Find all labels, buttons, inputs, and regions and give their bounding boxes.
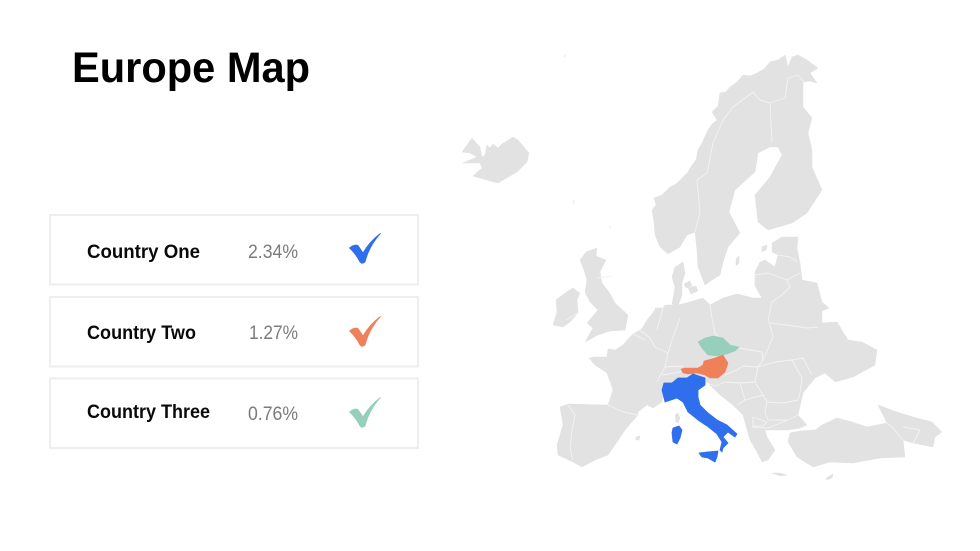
row: country one bbox=[50, 215, 418, 284]
base land: grey countries bbox=[462, 54, 942, 480]
country borders bbox=[566, 75, 920, 460]
row: country one: Country One bbox=[87, 242, 200, 263]
title: Europe Map bbox=[72, 44, 310, 92]
row: country two: Country Two bbox=[87, 323, 196, 344]
row: country three: Country Three bbox=[87, 402, 210, 423]
row: country three: 0.76% bbox=[248, 403, 298, 425]
row: country one: 2.34% bbox=[248, 241, 298, 263]
country: Czech Republic bbox=[698, 336, 739, 356]
country: Austria bbox=[681, 355, 728, 378]
row: country three bbox=[50, 378, 418, 448]
row: country two: 1.27% bbox=[249, 322, 298, 344]
row: country two bbox=[50, 297, 418, 366]
country: Italy bbox=[662, 374, 737, 462]
panel: country list bbox=[50, 215, 418, 448]
map of Europe bbox=[462, 54, 942, 480]
